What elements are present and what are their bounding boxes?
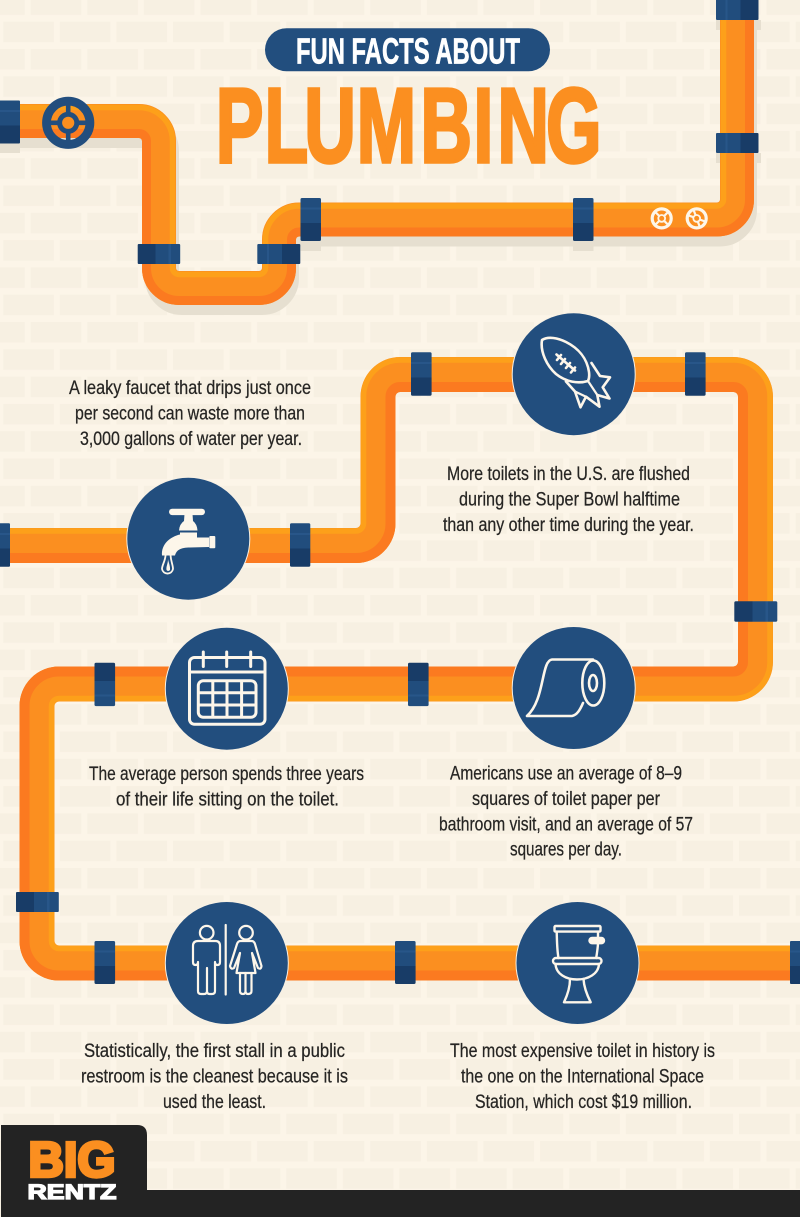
fact: toilet paper (439, 626, 693, 860)
fact: three years (89, 627, 364, 810)
three years text: The average person spends three years (89, 763, 364, 785)
icon: calendar (165, 627, 288, 750)
toilet paper text: squares of toilet paper per (472, 788, 660, 810)
icon: valve wheel (46, 101, 90, 144)
first stall text: used the least. (163, 1091, 266, 1113)
logo: RENTZ: RENTZ (28, 1181, 117, 1204)
top pipe (0, 0, 750, 300)
space toilet text: the one on the International Space (461, 1066, 704, 1088)
super bowl text: than any other time during the year. (443, 514, 694, 536)
icon: faucet (127, 477, 250, 600)
top pipe clamps (0, 0, 758, 264)
space toilet text: Station, which cost $19 million. (475, 1091, 692, 1113)
icon: toilet roll (512, 626, 635, 750)
icon: small white valve right (687, 209, 706, 228)
first stall text: Statistically, the first stall in a public (84, 1040, 345, 1062)
icon: small white valve left (652, 209, 671, 228)
toilet paper text: squares per day. (510, 838, 622, 860)
title line 1: FUN FACTS ABOUT (296, 30, 520, 71)
faucet text: per second can waste more than (75, 402, 305, 424)
logo: BIG: BIG (28, 1134, 116, 1188)
toilet paper text: Americans use an average of 8–9 (450, 762, 682, 784)
super bowl text: during the Super Bowl halftime (459, 488, 680, 510)
pipe clamps (0, 352, 800, 984)
title pill (265, 28, 550, 71)
top pipe run with valve and clamps (0, 0, 761, 300)
faucet text (69, 377, 311, 450)
space toilet text (450, 1040, 715, 1113)
faucet text: 3,000 gallons of water per year. (80, 428, 302, 450)
space toilet text: The most expensive toilet in history is (450, 1040, 715, 1062)
toilet paper text (439, 762, 693, 860)
pipe shadow (0, 10, 761, 298)
fact: super bowl (443, 313, 694, 536)
three years text: of their life sitting on the toilet. (116, 788, 339, 810)
first stall text (81, 1040, 348, 1113)
fact: leaky faucet (69, 377, 311, 600)
first stall text: restroom is the cleanest because it is (81, 1066, 348, 1088)
title line 2: PLUMBING (216, 68, 601, 186)
fact: space toilet (450, 902, 715, 1113)
toilet paper text: bathroom visit, and an average of 57 (439, 814, 693, 836)
icon: football with flames (512, 313, 635, 436)
super bowl text (443, 463, 694, 536)
three years text (89, 763, 364, 810)
footer logo panel (1, 1125, 800, 1217)
fact: first stall (81, 902, 348, 1113)
long winding pipe (0, 360, 800, 976)
icon: toilet (516, 902, 639, 1024)
super bowl text: More toilets in the U.S. are flushed (447, 463, 690, 485)
icon: restroom figures (165, 902, 288, 1024)
faucet text: A leaky faucet that drips just once (69, 377, 311, 399)
